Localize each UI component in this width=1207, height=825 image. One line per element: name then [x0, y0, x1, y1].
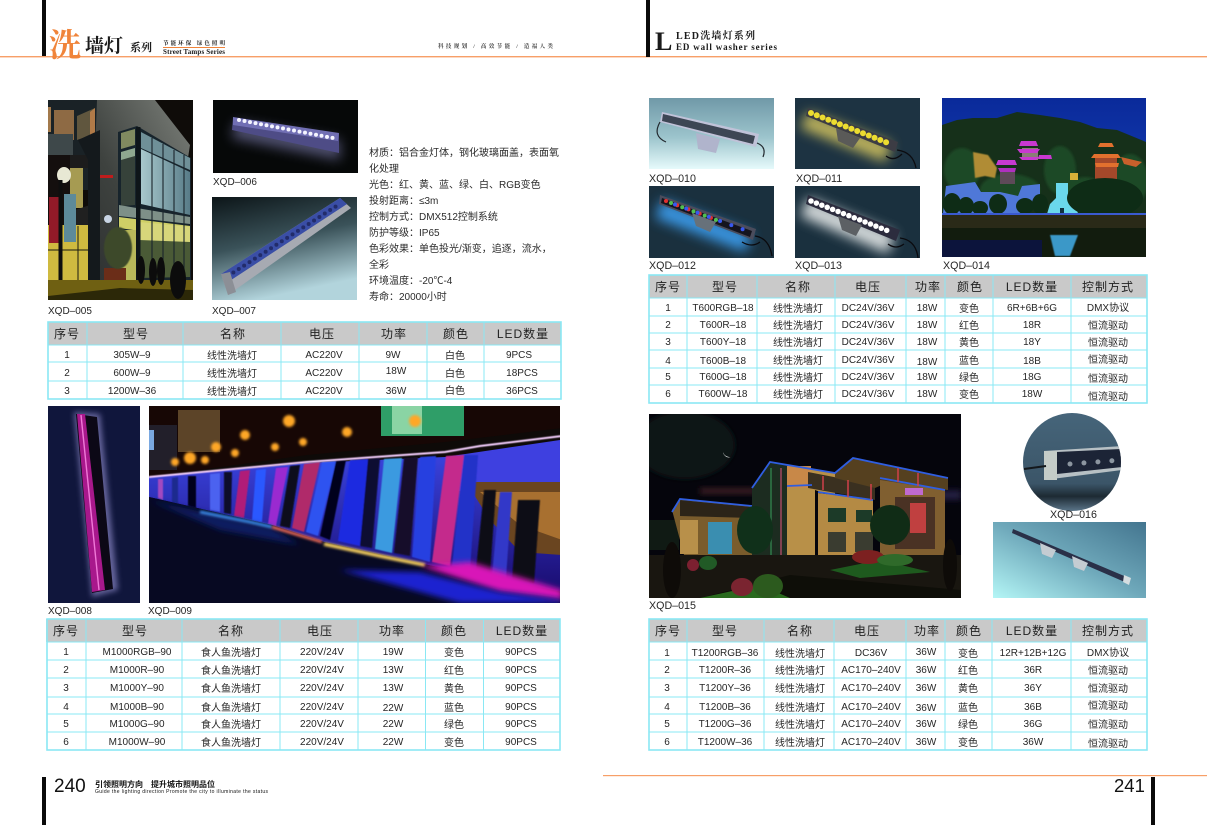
- table rows: 蓝色: [444, 701, 464, 714]
- table rows: 18W: [917, 337, 938, 348]
- table: XQD-005 to 007 models: [48, 322, 561, 399]
- table header row: 颜色: [443, 326, 469, 341]
- product specifications text: 防护等级：IP65: [369, 226, 440, 239]
- table rows: 6: [664, 737, 670, 748]
- table rows: 线性洗墙灯: [775, 664, 825, 677]
- left page header: 科技规划 / 高效节能 / 造福人类: [438, 42, 553, 50]
- table rows: T1200G–36: [699, 719, 752, 730]
- table rows: 1: [63, 647, 69, 658]
- table rows: 36W: [916, 665, 937, 676]
- table rows: M1000Y–90: [110, 683, 164, 694]
- right page footer: [603, 775, 1207, 825]
- table header row: LED数量: [496, 623, 548, 638]
- table rows: 13W: [383, 665, 404, 676]
- table rows: 绿色: [958, 718, 978, 731]
- table rows: AC170–240V: [841, 683, 901, 694]
- table header row: 名称: [220, 326, 246, 341]
- table header row: 型号: [123, 327, 149, 341]
- table rows: 恒流驱动: [1088, 353, 1128, 366]
- table rows: 恒流驱动: [1088, 699, 1128, 712]
- table rows: 绿色: [959, 371, 979, 384]
- table: T1200 series: [649, 619, 1147, 750]
- table rows: 22W: [383, 703, 404, 714]
- table rows: 线性洗墙灯: [773, 388, 823, 401]
- table rows: 36B: [1024, 702, 1042, 713]
- table header row: 功率: [915, 279, 941, 294]
- left page header: 系列: [130, 40, 152, 54]
- label XQD-013: XQD–013: [795, 260, 842, 272]
- product specifications text: 光色：红、黄、蓝、绿、白、RGB变色: [369, 178, 541, 191]
- table rows: 线性洗墙灯: [773, 319, 823, 332]
- product specifications text: 寿命：20000小时: [369, 290, 447, 303]
- label XQD-016: XQD–016: [1050, 509, 1097, 521]
- label XQD-012: XQD–012: [649, 260, 696, 272]
- table rows: 线性洗墙灯: [773, 336, 823, 349]
- table rows: M1000G–90: [109, 719, 165, 730]
- table rows: 食人鱼洗墙灯: [201, 701, 261, 714]
- table rows: 变色: [444, 646, 464, 659]
- photo: XQD-007 lamp on gradient: [212, 197, 357, 300]
- table rows: 18W: [386, 366, 407, 377]
- left page header: 洗: [49, 20, 81, 66]
- right page header: LED洗墙灯系列: [676, 29, 755, 42]
- table rows: DC36V: [855, 648, 887, 659]
- table rows: 线性洗墙灯: [775, 647, 825, 660]
- table rows: 1200W–36: [108, 386, 157, 397]
- table rows: 36W: [916, 703, 937, 714]
- table rows: 90PCS: [505, 702, 537, 713]
- left page footer: Guide the lighting direction Promote the city to illuminate the status: [95, 789, 268, 795]
- table rows: 4: [664, 702, 670, 713]
- table rows: 绿色: [444, 718, 464, 731]
- table header row: 功率: [381, 326, 407, 341]
- table rows: 恒流驱动: [1088, 664, 1128, 677]
- photo: XQD-013 white lamp: [795, 186, 920, 258]
- table header row: [54, 326, 549, 341]
- product specifications text: 环境温度：-20℃-4: [369, 274, 453, 287]
- table rows: 线性洗墙灯: [207, 385, 257, 398]
- photo: XQD-016 lamp on gradient: [993, 522, 1146, 598]
- table rows: 线性洗墙灯: [773, 302, 823, 315]
- table rows: 白色: [445, 384, 465, 397]
- table: XQD-008 and 009 models: [46, 619, 560, 750]
- table rows: 恒流驱动: [1088, 682, 1128, 695]
- table rows: 食人鱼洗墙灯: [201, 736, 261, 749]
- photo: XQD-005 building at night: [48, 100, 193, 300]
- table header row: LED数量: [1006, 279, 1058, 294]
- table rows: DC24V/36V: [842, 303, 895, 314]
- table rows: 18Y: [1023, 337, 1041, 348]
- table header row: 功率: [379, 623, 405, 638]
- table rows: 18W: [1022, 389, 1043, 400]
- table rows: 90PCS: [505, 647, 537, 658]
- table header row: 功率: [914, 623, 940, 638]
- table rows: 蓝色: [958, 701, 978, 714]
- table rows: 36W: [916, 647, 937, 658]
- table rows: 线性洗墙灯: [773, 354, 823, 367]
- table rows: 变色: [444, 736, 464, 749]
- table rows: 18W: [917, 320, 938, 331]
- table rows: [664, 646, 1129, 750]
- left page header: 墙灯: [85, 35, 123, 57]
- table rows: 18B: [1023, 356, 1041, 367]
- table header row: 序号: [655, 279, 681, 294]
- table rows: T1200R–36: [699, 665, 752, 676]
- table rows: T1200RGB–36: [692, 648, 759, 659]
- photo: XQD-012 RGB lamp: [649, 186, 774, 258]
- table rows: 36W: [916, 737, 937, 748]
- table rows: 36W: [916, 719, 937, 730]
- product specifications text: 投射距离：≤3m: [369, 194, 438, 207]
- table rows: DC24V/36V: [842, 337, 895, 348]
- table rows: 19W: [383, 647, 404, 658]
- label XQD-007: XQD–007: [212, 306, 256, 317]
- product specifications text: [369, 146, 559, 303]
- table rows: 红色: [958, 664, 978, 677]
- table rows: 线性洗墙灯: [775, 701, 825, 714]
- table rows: 黄色: [959, 336, 979, 349]
- table rows: 1: [64, 350, 70, 361]
- table rows: 18PCS: [506, 368, 538, 379]
- table rows: 白色: [445, 367, 465, 380]
- table header row: 型号: [712, 624, 738, 638]
- table rows: 5: [665, 372, 671, 383]
- table header row: LED数量: [497, 326, 549, 341]
- table rows: 恒流驱动: [1088, 390, 1128, 403]
- table rows: 6R+6B+6G: [1007, 303, 1057, 314]
- table header row: 颜色: [441, 623, 467, 638]
- table rows: 线性洗墙灯: [207, 349, 257, 362]
- table rows: 变色: [958, 736, 978, 749]
- table rows: 220V/24V: [300, 665, 344, 676]
- photo: XQD-006 lamp on black: [213, 100, 358, 173]
- table rows: DC24V/36V: [842, 389, 895, 400]
- table header row: [655, 623, 1134, 638]
- table rows: 18W: [917, 389, 938, 400]
- product specifications text: 材质：铝合金灯体，钢化玻璃面盖，表面氧: [369, 146, 559, 159]
- table rows: AC170–240V: [841, 665, 901, 676]
- label XQD-009: XQD–009: [148, 606, 192, 617]
- table rows: T600RGB–18: [692, 303, 754, 314]
- table rows: 90PCS: [505, 737, 537, 748]
- table header row: 控制方式: [1082, 623, 1134, 638]
- product specifications text: 化处理: [369, 162, 399, 175]
- table rows: 2: [665, 320, 671, 331]
- table rows: 黄色: [958, 682, 978, 695]
- table rows: DC24V/36V: [842, 372, 895, 383]
- table rows: 3: [665, 337, 671, 348]
- table rows: 6: [665, 389, 671, 400]
- table rows: T600B–18: [700, 356, 747, 367]
- label XQD-006: XQD–006: [213, 177, 257, 188]
- photo: XQD-011 yellow lamp: [795, 98, 920, 169]
- table rows: 食人鱼洗墙灯: [201, 646, 261, 659]
- table rows: 恒流驱动: [1088, 372, 1128, 385]
- table rows: 5: [664, 719, 670, 730]
- table header row: 名称: [787, 623, 813, 638]
- table rows: 12R+12B+12G: [1000, 648, 1067, 659]
- table rows: M1000RGB–90: [103, 647, 172, 658]
- table rows: 变色: [959, 388, 979, 401]
- table rows: 线性洗墙灯: [775, 718, 825, 731]
- table header row: 序号: [53, 623, 79, 638]
- table rows: 220V/24V: [300, 737, 344, 748]
- table rows: 白色: [445, 349, 465, 362]
- table rows: 恒流驱动: [1088, 336, 1128, 349]
- table rows: 18W: [917, 303, 938, 314]
- table rows: M1000B–90: [110, 702, 164, 713]
- table rows: 恒流驱动: [1088, 718, 1128, 731]
- table rows: M1000R–90: [110, 665, 165, 676]
- table rows: DMX协议: [1087, 301, 1129, 314]
- table rows: 食人鱼洗墙灯: [201, 682, 261, 695]
- table rows: [64, 349, 538, 398]
- table rows: 18G: [1023, 372, 1042, 383]
- photo: XQD-015 illuminated shopping building: [649, 414, 961, 598]
- table rows: 恒流驱动: [1088, 737, 1128, 750]
- label XQD-005: XQD–005: [48, 306, 92, 317]
- table rows: 36W: [916, 683, 937, 694]
- table rows: 36W: [1023, 737, 1044, 748]
- table header row: 电压: [855, 280, 881, 294]
- table rows: 13W: [383, 683, 404, 694]
- left page header: [0, 0, 1207, 66]
- table header row: 电压: [854, 624, 880, 638]
- right page footer: 241: [1114, 775, 1145, 796]
- table header row: 型号: [122, 624, 148, 638]
- table rows: [665, 301, 1129, 403]
- left page header: Street Tamps Series: [163, 48, 225, 56]
- table rows: 食人鱼洗墙灯: [201, 718, 261, 731]
- table rows: AC170–240V: [841, 719, 901, 730]
- table rows: DC24V/36V: [842, 320, 895, 331]
- label XQD-010: XQD–010: [649, 173, 696, 185]
- table rows: 1: [665, 303, 671, 314]
- table rows: 2: [664, 665, 670, 676]
- table rows: 变色: [959, 302, 979, 315]
- table rows: 36Y: [1024, 683, 1042, 694]
- table header row: LED数量: [1006, 623, 1058, 638]
- table rows: T600Y–18: [700, 337, 747, 348]
- table rows: DMX协议: [1087, 646, 1129, 659]
- table rows: T1200Y–36: [699, 683, 751, 694]
- label XQD-015: XQD–015: [649, 600, 696, 612]
- table rows: 4: [665, 356, 671, 367]
- label XQD-014: XQD–014: [943, 260, 990, 272]
- table rows: 90PCS: [505, 665, 537, 676]
- table rows: 9PCS: [506, 350, 532, 361]
- table rows: T600W–18: [699, 389, 748, 400]
- table rows: 220V/24V: [300, 719, 344, 730]
- left page footer: [42, 776, 268, 825]
- product specifications text: 色彩效果：单色投光/渐变，追逐，流水，: [369, 242, 552, 255]
- table header row: 颜色: [957, 279, 983, 294]
- table rows: 3: [664, 683, 670, 694]
- right page header: [646, 0, 777, 57]
- table rows: 36PCS: [506, 386, 538, 397]
- table rows: T1200W–36: [698, 737, 753, 748]
- label XQD-008: XQD–008: [48, 606, 92, 617]
- table rows: 变色: [958, 647, 978, 660]
- table rows: [63, 646, 537, 749]
- table rows: 恒流驱动: [1088, 319, 1128, 332]
- table rows: 9W: [386, 350, 401, 361]
- table rows: T600G–18: [699, 372, 747, 383]
- table rows: T600R–18: [700, 320, 747, 331]
- left page header: 节能环保 绿色照明: [163, 39, 225, 47]
- photo: XQD-008 magenta lamp: [48, 406, 140, 603]
- table rows: 3: [63, 683, 69, 694]
- table rows: 5: [63, 719, 69, 730]
- table rows: 2: [64, 368, 70, 379]
- table rows: AC220V: [305, 350, 343, 361]
- table rows: DC24V/36V: [842, 355, 895, 366]
- table rows: 食人鱼洗墙灯: [201, 664, 261, 677]
- left page footer: 240: [54, 776, 86, 797]
- photo: XQD-016 close-up circle: [1023, 413, 1122, 511]
- table rows: 6: [63, 737, 69, 748]
- table rows: 线性洗墙灯: [775, 736, 825, 749]
- left page footer: 引领照明方向 提升城市照明品位: [95, 779, 215, 789]
- table header row: 序号: [655, 623, 681, 638]
- table header row: 电压: [309, 327, 335, 341]
- table rows: 36W: [386, 386, 407, 397]
- table rows: AC170–240V: [841, 702, 901, 713]
- product specifications text: 控制方式：DMX512控制系统: [369, 210, 498, 223]
- table rows: 220V/24V: [300, 647, 344, 658]
- table rows: 线性洗墙灯: [773, 371, 823, 384]
- table rows: AC170–240V: [841, 737, 901, 748]
- table header row: 名称: [785, 279, 811, 294]
- table header row: 颜色: [956, 623, 982, 638]
- table rows: 2: [63, 665, 69, 676]
- label XQD-011: XQD–011: [796, 173, 842, 185]
- right page header: L: [655, 27, 672, 56]
- table rows: 36G: [1024, 719, 1043, 730]
- table rows: 4: [63, 702, 69, 713]
- table rows: 90PCS: [505, 719, 537, 730]
- table rows: AC220V: [305, 386, 343, 397]
- photo: XQD-014 illuminated hillside: [942, 98, 1146, 257]
- table rows: 305W–9: [113, 350, 151, 361]
- table rows: 90PCS: [505, 683, 537, 694]
- photo: XQD-010 lamp on pale blue: [649, 98, 774, 169]
- table rows: 红色: [444, 664, 464, 677]
- table rows: 18R: [1023, 320, 1041, 331]
- table rows: 22W: [383, 737, 404, 748]
- table rows: 线性洗墙灯: [775, 682, 825, 695]
- table rows: T1200B–36: [699, 702, 751, 713]
- photo: XQD-009 illuminated waterfall: [149, 406, 560, 603]
- right page header: ED wall washer series: [676, 42, 777, 52]
- table rows: AC220V: [305, 368, 343, 379]
- table rows: 线性洗墙灯: [207, 367, 257, 380]
- table rows: 36R: [1024, 665, 1042, 676]
- table header row: 型号: [712, 280, 738, 294]
- table: T600 series: [649, 275, 1147, 403]
- table rows: 蓝色: [959, 354, 979, 367]
- table rows: 1: [664, 648, 670, 659]
- table header row: 名称: [218, 623, 244, 638]
- table rows: 220V/24V: [300, 702, 344, 713]
- table rows: 红色: [959, 319, 979, 332]
- table header row: 控制方式: [1082, 279, 1134, 294]
- table rows: 18W: [917, 372, 938, 383]
- table header row: 电压: [307, 624, 333, 638]
- table header row: 序号: [54, 326, 80, 341]
- table rows: 18W: [917, 357, 938, 368]
- table rows: M1000W–90: [109, 737, 166, 748]
- table rows: 22W: [383, 719, 404, 730]
- table header row: [655, 279, 1134, 294]
- table rows: 220V/24V: [300, 683, 344, 694]
- table rows: 3: [64, 386, 70, 397]
- table rows: 黄色: [444, 682, 464, 695]
- table header row: [53, 623, 548, 638]
- product specifications text: 全彩: [369, 258, 389, 271]
- table rows: 600W–9: [113, 368, 151, 379]
